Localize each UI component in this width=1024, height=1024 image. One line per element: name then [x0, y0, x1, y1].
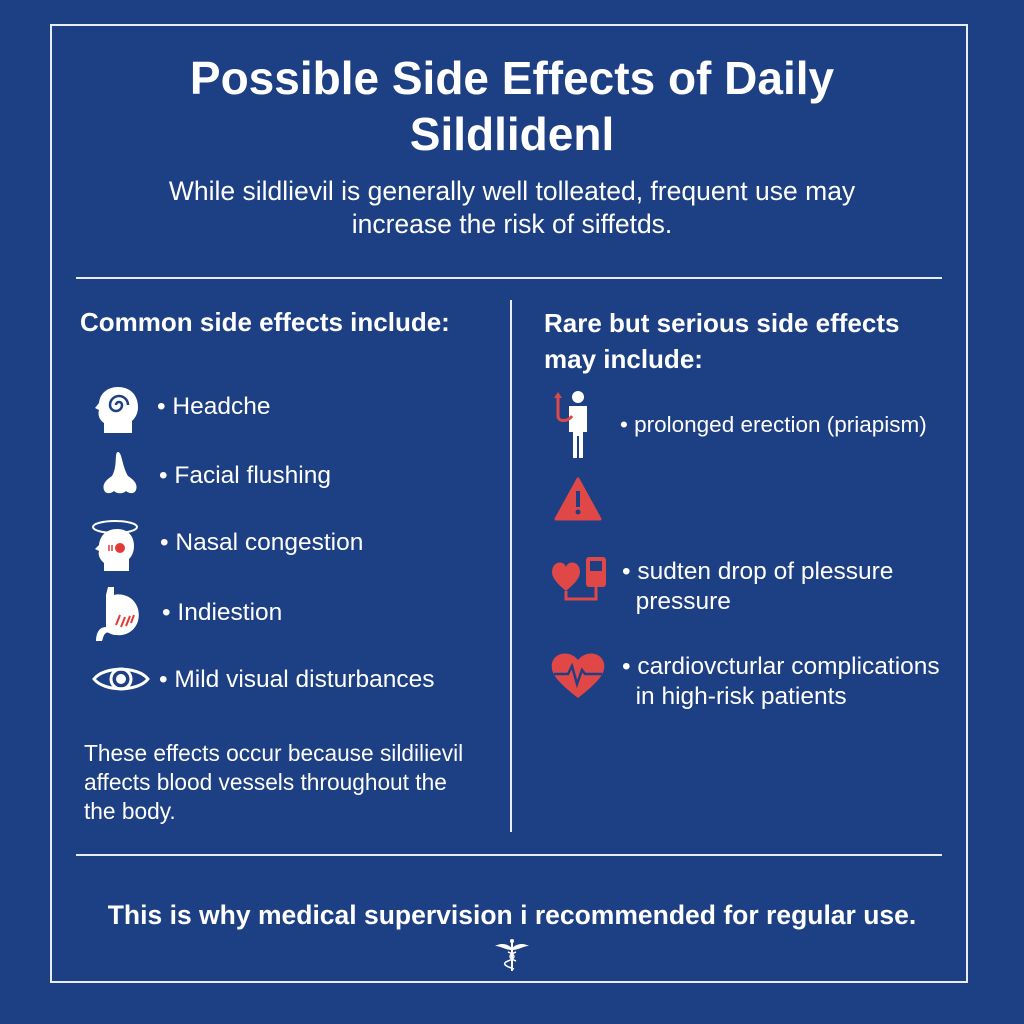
item: cardiovascular: • cardiovcturlar complications — [622, 653, 940, 680]
item: indigestion: • Indiestion — [162, 599, 282, 626]
heading: rare — [544, 308, 899, 374]
item: headache — [95, 387, 270, 433]
subtitle: While sildlievil is generally well tolleated, frequent use may — [169, 176, 855, 206]
icon: head spiral — [95, 387, 138, 433]
heading: common: Common side effects include: — [80, 307, 450, 337]
icon: dizzy head — [92, 520, 138, 571]
heading: rare: may include: — [544, 344, 703, 374]
icon: nose — [104, 452, 136, 494]
icon: person arrow — [554, 391, 587, 458]
item: indigestion — [96, 587, 282, 641]
item: visual: • Mild visual disturbances — [159, 666, 434, 693]
item: cardiovascular: in high-risk patients — [636, 683, 847, 710]
icon: stomach — [96, 587, 139, 641]
text: explanation: the body. — [84, 798, 176, 824]
item: cardiovascular — [552, 653, 940, 710]
panel: common side effects — [80, 307, 463, 824]
heading: rare: Rare but serious side effects — [544, 308, 899, 338]
subtitle: increase the risk of siffetds. — [352, 209, 672, 239]
text: explanation: These effects occur because sildilievil — [84, 740, 463, 766]
item: flushing: • Facial flushing — [159, 462, 331, 489]
footer text: This is why medical supervision i recommended for regular use. — [108, 900, 916, 930]
item: pressure drop — [552, 557, 893, 615]
text: explanation: affects blood vessels throughout the — [84, 769, 447, 795]
item: nasal congestion — [92, 520, 363, 571]
icon: heart pulse — [552, 654, 604, 698]
item: flushing — [104, 452, 331, 494]
icon: heart monitor — [552, 557, 606, 600]
item: pressure drop: pressure — [636, 588, 731, 615]
item: headache: • Headche — [157, 393, 270, 420]
subtitle — [169, 176, 855, 239]
title: Possible Side Effects of Daily — [190, 52, 834, 104]
icon: caduceus — [495, 939, 529, 971]
item: nasal congestion: • Nasal congestion — [160, 529, 363, 556]
title: Sildlidenl — [410, 108, 614, 160]
icon: warning — [554, 477, 602, 520]
item: priapism: • prolonged erection (priapism) — [620, 412, 927, 437]
title — [190, 52, 834, 160]
icon: eye — [92, 668, 150, 690]
panel: rare side effects — [544, 308, 940, 710]
item: priapism — [554, 391, 927, 458]
text: explanation — [84, 740, 463, 824]
item: pressure drop: • sudten drop of plessure — [622, 558, 893, 585]
